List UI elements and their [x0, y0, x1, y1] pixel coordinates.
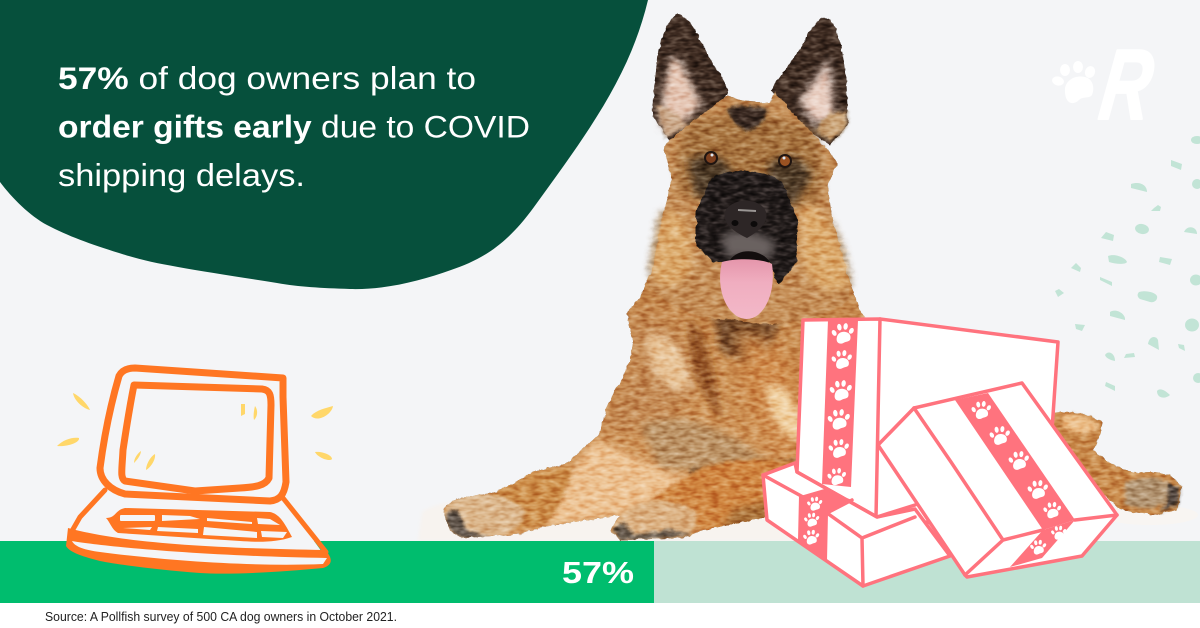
icon: paw	[1051, 61, 1097, 103]
yellow sparks	[57, 393, 333, 470]
dog: torso and front legs	[443, 213, 866, 541]
headline	[58, 60, 530, 193]
icon: laptop	[57, 368, 333, 574]
floor shadow	[418, 502, 1000, 541]
dog fur layers	[443, 14, 1182, 540]
dog: left ear	[653, 14, 728, 145]
laptop screen	[122, 385, 271, 491]
dog: right ear	[771, 18, 848, 145]
headline: shipping delays.	[58, 157, 305, 193]
laptop lid	[100, 368, 286, 501]
box: upright back	[797, 319, 1058, 530]
laptop keyboard	[106, 508, 292, 542]
dog: nose	[725, 201, 767, 238]
bar label: 57%	[562, 555, 634, 590]
source note: Source: A Pollfish survey of 500 CA dog owners in October 2021.	[45, 610, 397, 624]
dog: chin	[722, 232, 775, 258]
logo letter: R	[1094, 29, 1160, 141]
dog: head	[648, 92, 850, 324]
progress bar: 57%	[0, 541, 1200, 603]
box: flat lower left	[763, 463, 950, 586]
dog: right eye	[778, 154, 792, 168]
box: tilted front	[878, 383, 1117, 577]
logo	[1051, 29, 1160, 141]
dog: tongue	[720, 251, 773, 319]
icon: gift boxes	[763, 319, 1117, 586]
dog: hind leg and tail	[1040, 405, 1182, 515]
speckles	[1055, 136, 1200, 398]
green blob panel	[0, 0, 648, 289]
dog: left eye	[704, 151, 718, 165]
headline: order gifts early due to COVID	[58, 108, 530, 144]
laptop base	[66, 490, 331, 574]
photo: german shepherd	[443, 14, 1182, 540]
headline: 57% of dog owners plan to	[58, 60, 476, 96]
